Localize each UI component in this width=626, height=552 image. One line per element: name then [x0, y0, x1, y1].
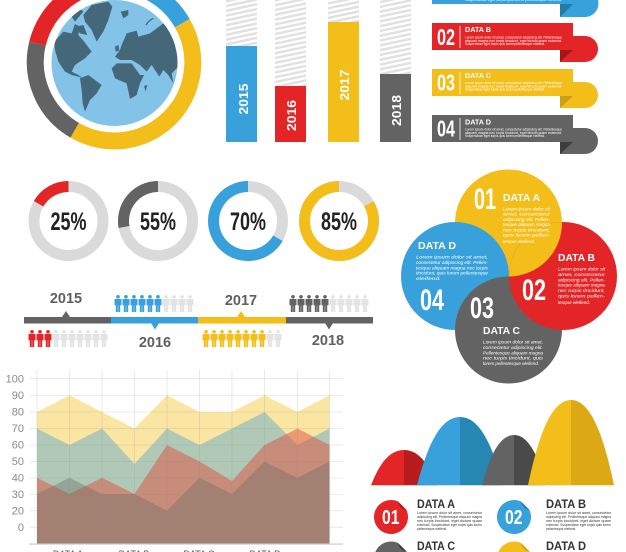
timeline — [24, 291, 373, 351]
venn text D: DATA D — [418, 241, 456, 252]
bar chart: years — [226, 0, 411, 142]
ribbon D: DATA D — [465, 118, 492, 126]
legend item B: nec turpis tincidunt, eget dictum quam — [546, 519, 611, 523]
year labels: 2018 — [312, 333, 344, 349]
ribbon C — [432, 69, 598, 108]
area chart — [6, 370, 343, 552]
ribbon B: Suspendisse eget turpis quis lorem pellentesque eleifend. — [465, 42, 545, 46]
legend item C — [374, 541, 455, 552]
ribbon D: Lorem ipsum dolor sit amet, consectetur adipiscing elit. Pellentesque — [465, 128, 562, 132]
venn text A — [474, 183, 551, 244]
venn text A: amet, consectetur — [503, 212, 551, 217]
bar 2017 — [328, 22, 359, 142]
y axis labels: 30 — [12, 489, 24, 501]
donut 25%: 25% — [50, 208, 86, 236]
bar 2018 — [380, 74, 411, 142]
legend item A: Lorem ipsum dolor sit amet, consectetur — [417, 511, 483, 515]
y axis labels: 90 — [12, 390, 24, 402]
ribbon C: Suspendisse eget turpis quis lorem pellentesque eleifend. — [465, 88, 545, 92]
ribbon D: 04 — [437, 116, 455, 142]
bar 2016: 2016 — [284, 100, 299, 131]
legend item B: 02 — [505, 507, 522, 529]
y axis labels: 20 — [12, 505, 24, 517]
venn diagram — [401, 170, 617, 384]
people icons 2015 — [28, 330, 108, 347]
venn text C: nec turpis tincidunt, quis — [483, 356, 544, 361]
venn circles — [401, 170, 617, 384]
hatched bar backgrounds — [226, 0, 411, 86]
ribbon B: 02 — [437, 24, 455, 50]
venn text D: tesque aliquam magna nec turpis — [416, 265, 489, 270]
venn text A: nec turpis tincidunt, — [503, 227, 550, 232]
venn text B: amet, consectetur — [558, 272, 606, 277]
legend item B — [497, 499, 612, 534]
venn text A: tesque aliquam magna — [503, 222, 550, 227]
legend item B: Lorem ipsum dolor sit amet, consectetur — [546, 511, 612, 515]
legend item A: pellentesque eleifend. — [417, 527, 447, 531]
venn text D: Lorem ipsum dolor sit amet, — [416, 254, 488, 260]
people icons 2016 — [114, 295, 194, 312]
bar 2015 — [226, 46, 257, 142]
ribbon list — [432, 0, 598, 154]
venn text A: 01 — [474, 183, 496, 216]
yellow bell — [528, 400, 614, 485]
venn text B: quis lorem pellen- — [558, 294, 606, 298]
venn text D: 04 — [420, 284, 444, 317]
ring: blue segment — [114, 0, 182, 23]
x axis line — [29, 544, 343, 545]
venn text A: adipiscing elit. Pellen- — [503, 217, 550, 222]
year labels — [50, 291, 344, 351]
venn text A: DATA A — [503, 193, 540, 204]
ribbon C: DATA C — [465, 71, 492, 80]
ribbon C: Lorem ipsum dolor sit amet, consectetur adipiscing elit. Pellentesque — [465, 81, 562, 85]
venn text C: consectetur adipiscing elit. — [483, 345, 543, 350]
donut 85% — [304, 186, 374, 256]
venn text A: quis lorem pellen- — [503, 232, 551, 238]
timeline bar — [24, 311, 373, 330]
ribbon B: DATA B — [465, 25, 492, 34]
legend item D — [497, 541, 586, 552]
venn text C: lorem pellentesque eleifend. — [483, 361, 539, 366]
venn text D — [416, 241, 489, 317]
venn text A: Lorem ipsum dolor sit — [503, 206, 551, 212]
donut 85%: 85% — [321, 208, 357, 236]
donut 70% — [214, 186, 282, 256]
bar 2017: 2017 — [337, 70, 352, 100]
legend — [374, 499, 612, 552]
venn text B: 02 — [522, 274, 546, 307]
legend item A: adipiscing elit. Pellentesque aliquam magna — [417, 515, 483, 519]
venn text B: tesque aliquam magna — [558, 283, 605, 288]
grey bell — [482, 435, 546, 485]
ribbon B: aliquam magna nec turpis tincidunt, eget dictum quam euismod. — [465, 39, 562, 43]
legend item A: 01 — [382, 507, 400, 529]
venn text C: DATA C — [483, 326, 520, 337]
y axis labels: 50 — [12, 456, 24, 468]
people icons 2017 — [202, 330, 282, 347]
bar 2015: 2015 — [236, 84, 251, 114]
legend item A: nec turpis tincidunt, eget dictum quam — [417, 519, 482, 523]
world map continents — [54, 2, 178, 112]
venn text C: 03 — [470, 292, 494, 325]
legend item B: euismod. Suspendisse eget turpis quis lorem — [546, 523, 611, 527]
ribbon D — [432, 115, 598, 154]
yellow area — [37, 395, 330, 544]
ring: yellow segment — [75, 23, 193, 141]
legend item B: pellentesque eleifend. — [546, 527, 576, 531]
ribbon B: Lorem ipsum dolor sit amet, consectetur adipiscing elit. Pellentesque — [465, 36, 562, 40]
y axis labels: 60 — [12, 440, 24, 452]
green area — [37, 412, 330, 544]
y axis labels: 80 — [12, 407, 24, 419]
bell chart — [371, 400, 614, 485]
y axis labels: 0 — [18, 522, 24, 534]
venn text D: eleifend. — [416, 276, 441, 281]
venn text C — [470, 292, 544, 366]
red bell — [371, 450, 437, 485]
bar 2018: 2018 — [389, 95, 404, 126]
year labels: 2015 — [50, 291, 82, 307]
ribbon C: 03 — [437, 70, 455, 96]
x axis labels — [53, 549, 281, 552]
donut 70%: 70% — [230, 208, 266, 236]
venn text C: Lorem ipsum dolor sit amet, — [483, 340, 543, 344]
people icons 2018 — [290, 295, 368, 312]
year labels: 2017 — [225, 293, 257, 309]
venn text D: consectetur adipiscing elit. Pellen- — [416, 260, 488, 265]
venn text B: tesque eleifend. — [558, 300, 590, 305]
ribbon A — [432, 0, 598, 17]
venn text B — [522, 253, 606, 307]
legend item A — [374, 499, 483, 534]
y axis labels: 70 — [12, 423, 24, 435]
year labels: 2016 — [139, 335, 171, 351]
red area — [37, 428, 330, 544]
globe ocean — [52, 0, 178, 126]
ribbon D: aliquam magna nec turpis tincidunt, eget dictum quam euismod. — [465, 131, 562, 135]
venn text B: adipiscing elit. Pellen- — [558, 277, 605, 282]
legend item A: DATA A — [417, 499, 455, 511]
ribbon D: Suspendisse eget turpis quis lorem pellentesque eleifend. — [465, 134, 545, 138]
ring: grey segment — [35, 44, 75, 130]
venn text A: tesque eleifend. — [503, 239, 535, 244]
bar 2016 — [275, 86, 306, 142]
donut 55% — [123, 186, 192, 256]
ribbon B — [432, 23, 598, 62]
legend item A: euismod. Suspendisse eget turpis quis lorem — [417, 523, 482, 527]
ribbon C: aliquam magna nec turpis tincidunt, eget dictum quam euismod. — [465, 84, 562, 88]
grid lines — [30, 370, 343, 544]
y axis labels: 40 — [12, 473, 24, 485]
venn text C: Pellentesque aliquam magna — [483, 350, 543, 355]
legend item B: adipiscing elit. Pellentesque aliquam magna — [546, 515, 612, 519]
dark area — [37, 462, 330, 544]
donut charts — [34, 186, 374, 256]
venn text B: nec turpis tincidunt, — [558, 288, 605, 293]
venn text D: tincidunt, quis lorem pellentesque — [416, 271, 488, 276]
legend item B: DATA B — [546, 499, 586, 511]
venn text B: DATA B — [558, 253, 595, 264]
blue bell — [417, 417, 503, 485]
ring: red segment — [38, 0, 114, 44]
donut 25% — [34, 186, 103, 256]
y axis labels: 100 — [6, 374, 24, 386]
donut 55%: 55% — [140, 208, 176, 236]
venn text B: Lorem ipsum dolor sit — [558, 266, 606, 272]
y axis labels — [6, 374, 24, 534]
globe with ring — [35, 0, 193, 141]
